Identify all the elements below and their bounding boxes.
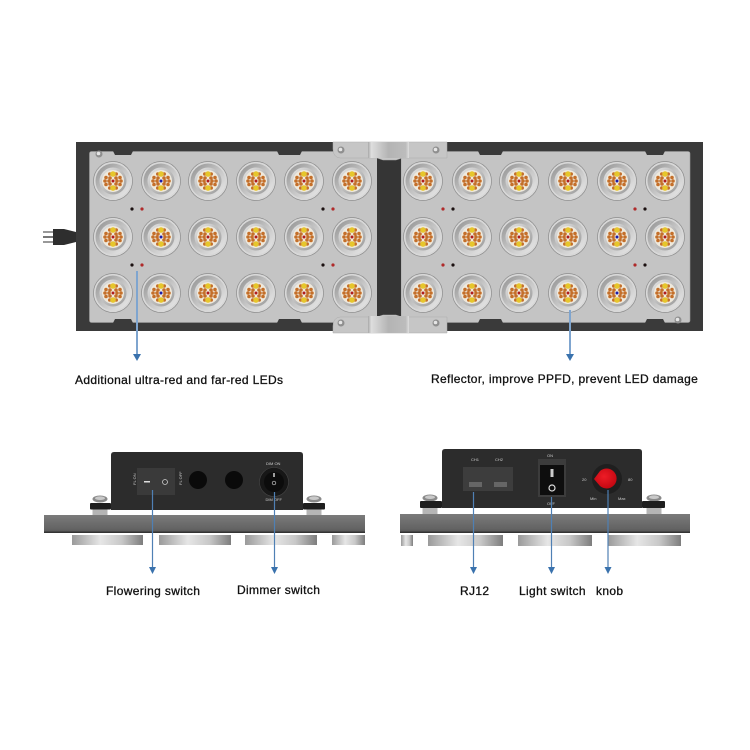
red dimmer knob: Min [590,496,596,501]
reflector discs [72,535,365,545]
light rocker switch [538,453,566,506]
panel: right control box side view [400,449,690,546]
RJ12 ports: CH2 [495,457,504,462]
arrow: to reflector [566,310,574,361]
red dimmer knob: Max [618,496,626,501]
flowering rocker switch: FL ON [132,473,137,485]
light rocker switch: ON [547,453,553,458]
dimmer round switch [260,461,288,502]
label: light switch: Light switch [519,584,586,598]
red dimmer knob: 80 [628,477,633,482]
panel: left control box side view [44,452,365,545]
bottom hinge bracket [333,315,447,333]
top hinge bracket [333,142,447,160]
mounting tabs and bolts [90,496,325,515]
label: far-red LEDs: Additional ultra-red and far-red LEDs [75,373,283,387]
arrowheads [470,567,612,574]
panel: LED grow light fixture [43,142,703,333]
lamp bar [400,514,690,532]
plate notches [113,151,665,323]
RJ12 ports: CH1 [471,457,480,462]
light rocker switch: OFF [547,501,556,506]
dimmer round switch: DIM OFF [266,497,282,502]
arrow: knob [607,490,609,572]
RJ12 ports [463,457,513,491]
reflector discs [401,535,681,546]
arrow: to far-red LEDs [133,271,141,361]
arrow: flowering switch [152,490,154,572]
red dimmer knob: 20 [582,477,587,482]
control box [111,452,303,510]
control box [442,449,642,508]
power plug [43,229,76,245]
left reflector plate [90,152,378,322]
LED modules: left panel [94,162,372,312]
label: reflector: Reflector, improve PPFD, prevent LED damage [431,372,698,386]
arrow: dimmer switch [274,492,276,572]
center gap [377,156,401,318]
corner screws [96,150,682,324]
label: dimmer switch: Dimmer switch [237,583,320,597]
lamp bar [44,515,365,532]
dark outer frame [76,142,703,331]
arrowheads [149,567,278,574]
label: knob: knob [596,584,623,598]
mounting tabs and bolts [420,494,665,514]
far-red indicator LEDs [130,207,647,267]
blind holes [189,471,243,489]
arrow: RJ12 [472,492,474,572]
label: RJ12: RJ12 [460,584,489,598]
right reflector plate [401,152,690,322]
red dimmer knob [582,464,633,501]
label: flowering switch: Flowering switch [106,584,200,598]
LED modules: right panel [404,162,684,312]
arrow: light switch [550,497,552,572]
flowering rocker switch [132,468,183,495]
flowering rocker switch: FL OFF [178,471,183,485]
dimmer round switch: DIM ON [266,461,281,466]
